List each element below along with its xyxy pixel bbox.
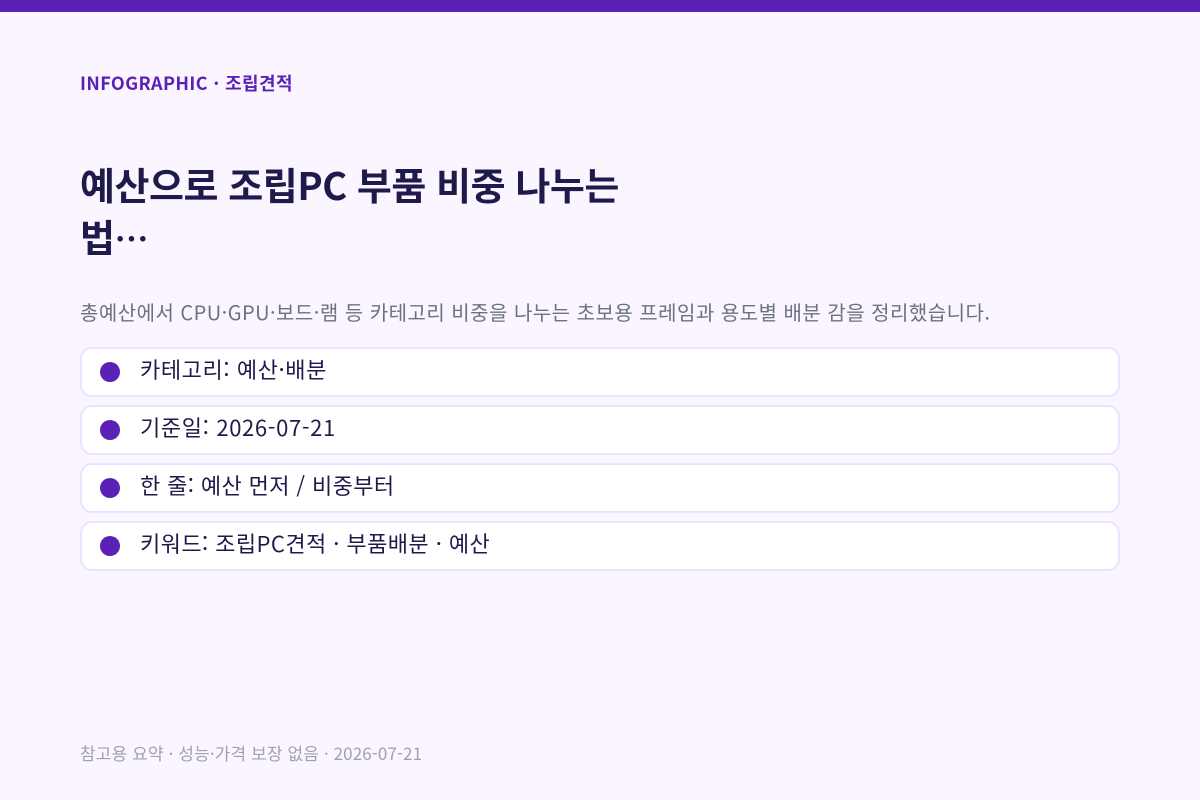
row: category (80, 347, 1120, 397)
title (80, 156, 619, 263)
footer note: 참고용 요약 · 성능·가격 보장 없음 · 2026-07-21 (80, 740, 422, 765)
row: category: 카테고리: 예산·배분 (140, 353, 327, 385)
row: keywords (80, 521, 1120, 571)
row: one line summary (80, 463, 1120, 513)
row: date: 기준일: 2026-07-21 (140, 411, 336, 443)
panel: info rows (80, 347, 1120, 571)
title: 예산으로 조립PC 부품 비중 나누는 (80, 156, 619, 211)
row: keywords: 키워드: 조립PC견적 · 부품배분 · 예산 (140, 527, 490, 559)
row: date (80, 405, 1120, 455)
eyebrow label: INFOGRAPHIC · 조립견적 (80, 70, 293, 96)
top accent bar (0, 0, 1200, 12)
title: 법… (80, 208, 149, 263)
subtitle: 총예산에서 CPU·GPU·보드·램 등 카테고리 비중을 나누는 초보용 프레임과 용도별 배분 감을 정리했습니다. (80, 297, 990, 326)
row: one line summary: 한 줄: 예산 먼저 / 비중부터 (140, 469, 394, 501)
